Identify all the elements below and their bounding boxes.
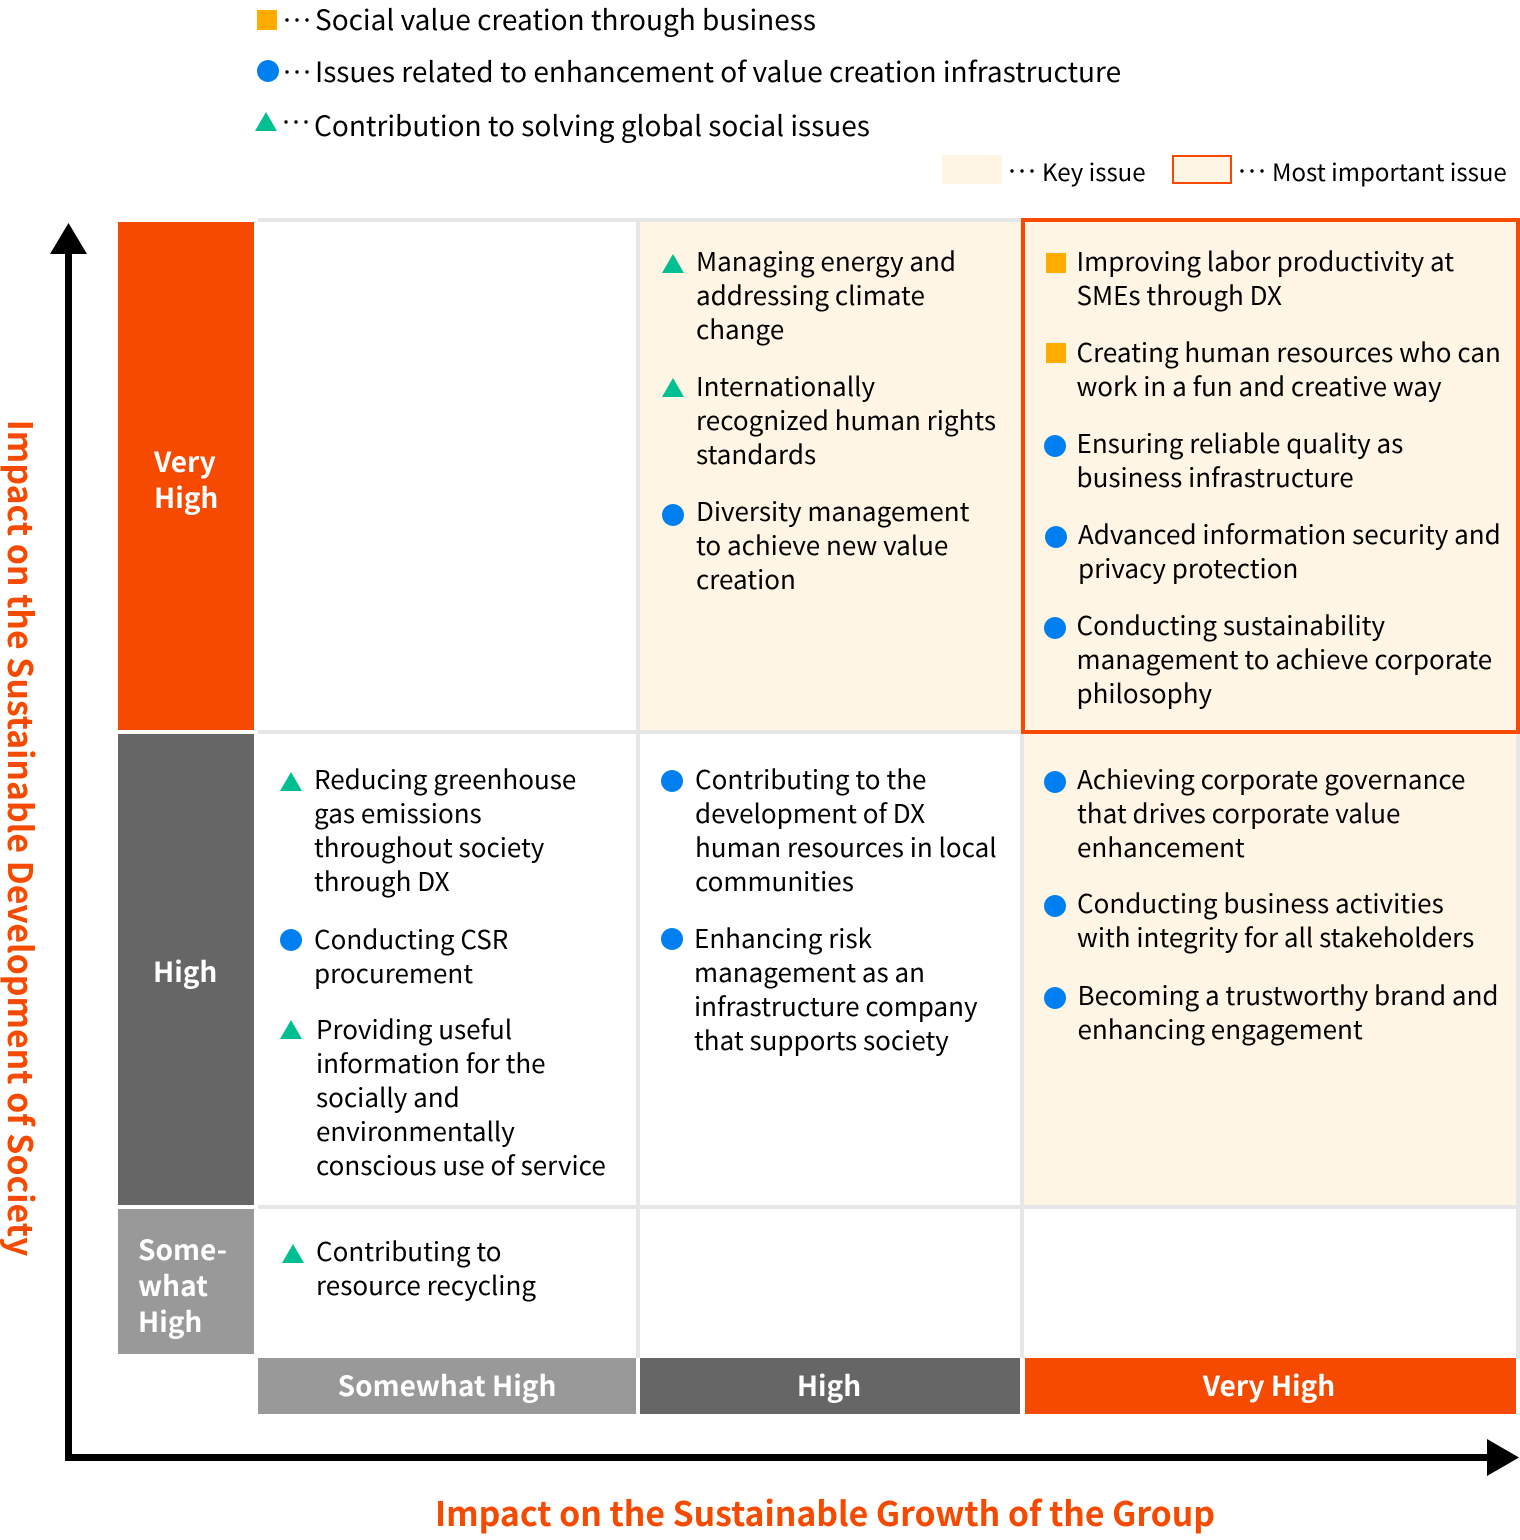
issue: integrity: with integrity for all stakeholders (1077, 918, 1474, 955)
icon: circle (1045, 526, 1067, 548)
issue: energy and climate: Managing energy and (696, 242, 956, 279)
icon: circle (1044, 771, 1066, 793)
issue: sustainability management (1076, 606, 1492, 711)
issue: corporate governance: Achieving corporate governance (1077, 760, 1465, 797)
cell: high society, somewhat high growth (280, 760, 606, 1183)
issue: useful information: environmentally (316, 1112, 515, 1149)
issue: CSR procurement: procurement (314, 954, 473, 991)
icon: circle (661, 770, 683, 792)
issue: quality: business infrastructure (1076, 458, 1354, 495)
icon: circle (280, 929, 302, 951)
issue: risk management: infrastructure company (694, 987, 978, 1024)
cell: high society, high growth (661, 760, 997, 1058)
column header: High (640, 1358, 1020, 1414)
issue: energy and climate: change (696, 310, 784, 347)
issue: useful information: Providing useful (316, 1010, 512, 1047)
icon: triangle (280, 772, 302, 791)
icon: circle (661, 928, 683, 950)
issue: human resources: Creating human resources who can (1076, 333, 1501, 370)
issue: DX human resources: human resources in local (695, 828, 997, 865)
legend: infrastructure text: Issues related to enhancement of value creation infrastructure (315, 51, 1121, 91)
legend: triangle (255, 112, 277, 131)
column header: High: High (797, 1365, 861, 1405)
legend: dots (1010, 169, 1264, 173)
issue: human rights: standards (696, 435, 816, 472)
legend: most important text: Most important issue (1272, 153, 1507, 188)
legend: issue levels (942, 153, 1507, 188)
column header: Somewhat High (258, 1358, 636, 1414)
column header: Somewhat High: Somewhat High (338, 1365, 556, 1405)
column header: Very High (1025, 1358, 1516, 1414)
issue: brand: enhancing engagement (1078, 1010, 1363, 1047)
issue: diversity (696, 492, 969, 597)
icon: triangle (662, 254, 684, 273)
issue: DX human resources: communities (695, 862, 854, 899)
row header: Somewhat High: High (138, 1301, 202, 1341)
issue: greenhouse gas: Reducing greenhouse (314, 760, 576, 797)
issue: energy and climate: addressing climate (696, 276, 925, 313)
issue: diversity: to achieve new value (696, 526, 948, 563)
issue: human rights (696, 367, 996, 472)
issue: risk management: Enhancing risk (694, 919, 872, 956)
cell: high society, very high growth (1044, 760, 1499, 1047)
legend: most important swatch (1172, 155, 1232, 184)
row header: Somewhat High: what (138, 1265, 208, 1305)
issue: resource recycling: Contributing to (316, 1232, 502, 1269)
issue: quality (1076, 424, 1403, 495)
icon: square (1046, 343, 1066, 363)
issue: diversity: creation (696, 560, 796, 597)
legend: social value text: Social value creation through business (315, 0, 816, 39)
cell: most important issues (1044, 242, 1501, 711)
icon: triangle (662, 378, 684, 397)
icon: circle (1044, 435, 1066, 457)
legend: issue categories (255, 0, 1121, 145)
issue: labor productivity: Improving labor productivity at (1076, 242, 1454, 279)
issue: corporate governance: that drives corporate value (1077, 794, 1400, 831)
row header: Very High: High (154, 477, 218, 517)
issue: risk management: management as an (694, 953, 925, 990)
issue: DX human resources: Contributing to the (695, 760, 926, 797)
row header: Somewhat High: Some- (138, 1229, 227, 1269)
issue: diversity: Diversity management (696, 492, 969, 529)
legend: key issue swatch (942, 155, 1002, 184)
issue: sustainability management: philosophy (1076, 674, 1212, 711)
issue: DX human resources: development of DX (695, 794, 925, 831)
issue: useful information (316, 1010, 606, 1183)
legend: global issues text: Contribution to solving global social issues (314, 105, 870, 145)
issue: CSR procurement (314, 920, 508, 991)
issue: risk management (694, 919, 978, 1058)
issue: risk management: that supports society (694, 1021, 949, 1058)
issue: resource recycling: resource recycling (316, 1266, 536, 1303)
legend: square (257, 10, 277, 30)
issue: useful information: conscious use of service (316, 1146, 606, 1183)
issue: labor productivity (1076, 242, 1454, 313)
legend: dots (284, 18, 309, 124)
issue: corporate governance (1077, 760, 1465, 865)
issue: brand (1078, 976, 1499, 1047)
issue: energy and climate (696, 242, 956, 347)
issue: sustainability management: Conducting sustainability (1076, 606, 1385, 643)
issue: brand: Becoming a trustworthy brand and (1078, 976, 1499, 1013)
issue: greenhouse gas (314, 760, 576, 899)
issue: security (1078, 515, 1501, 586)
legend: circle (257, 60, 279, 82)
row header: Very High: Very (154, 441, 216, 481)
issue: quality: Ensuring reliable quality as (1076, 424, 1403, 461)
issue: useful information: socially and (316, 1078, 460, 1115)
matrix grid lines and tinted cells (258, 218, 1520, 1358)
issue: corporate governance: enhancement (1077, 828, 1245, 865)
icon: triangle (280, 1020, 302, 1039)
issue: human resources (1076, 333, 1501, 404)
row header: High (118, 734, 254, 1205)
issue: greenhouse gas: gas emissions (314, 794, 482, 831)
issue: sustainability management: management to achieve corporate (1076, 640, 1492, 677)
issue: integrity: Conducting business activities (1077, 884, 1444, 921)
cell: somewhat high society (282, 1232, 536, 1303)
column header: Very High: Very High (1203, 1365, 1335, 1405)
issue: DX human resources (695, 760, 997, 899)
issue: human resources: work in a fun and creative way (1076, 367, 1442, 404)
issue: human rights: Internationally (696, 367, 875, 404)
icon: circle (1044, 895, 1066, 917)
icon: circle (662, 504, 684, 526)
icon: triangle (282, 1244, 304, 1263)
row header: High: High (153, 951, 217, 991)
icon: circle (1044, 987, 1066, 1009)
cell: very high society, high growth (662, 242, 996, 597)
x axis label: Impact on the Sustainable Growth of the Group (435, 1487, 1215, 1536)
icon: square (1046, 253, 1066, 273)
issue: integrity (1077, 884, 1474, 955)
issue: greenhouse gas: throughout society (314, 828, 544, 865)
issue: CSR procurement: Conducting CSR (314, 920, 508, 957)
legend: key issue text: Key issue (1042, 153, 1146, 188)
issue: security: privacy protection (1078, 549, 1298, 586)
row header: Very High (118, 222, 254, 730)
issue: greenhouse gas: through DX (314, 862, 450, 899)
row header: Somewhat High (118, 1209, 254, 1354)
issue: human rights: recognized human rights (696, 401, 996, 438)
issue: security: Advanced information security and (1078, 515, 1501, 552)
issue: labor productivity: SMEs through DX (1076, 276, 1282, 313)
issue: resource recycling (316, 1232, 536, 1303)
issue: useful information: information for the (316, 1044, 546, 1081)
icon: circle (1044, 617, 1066, 639)
